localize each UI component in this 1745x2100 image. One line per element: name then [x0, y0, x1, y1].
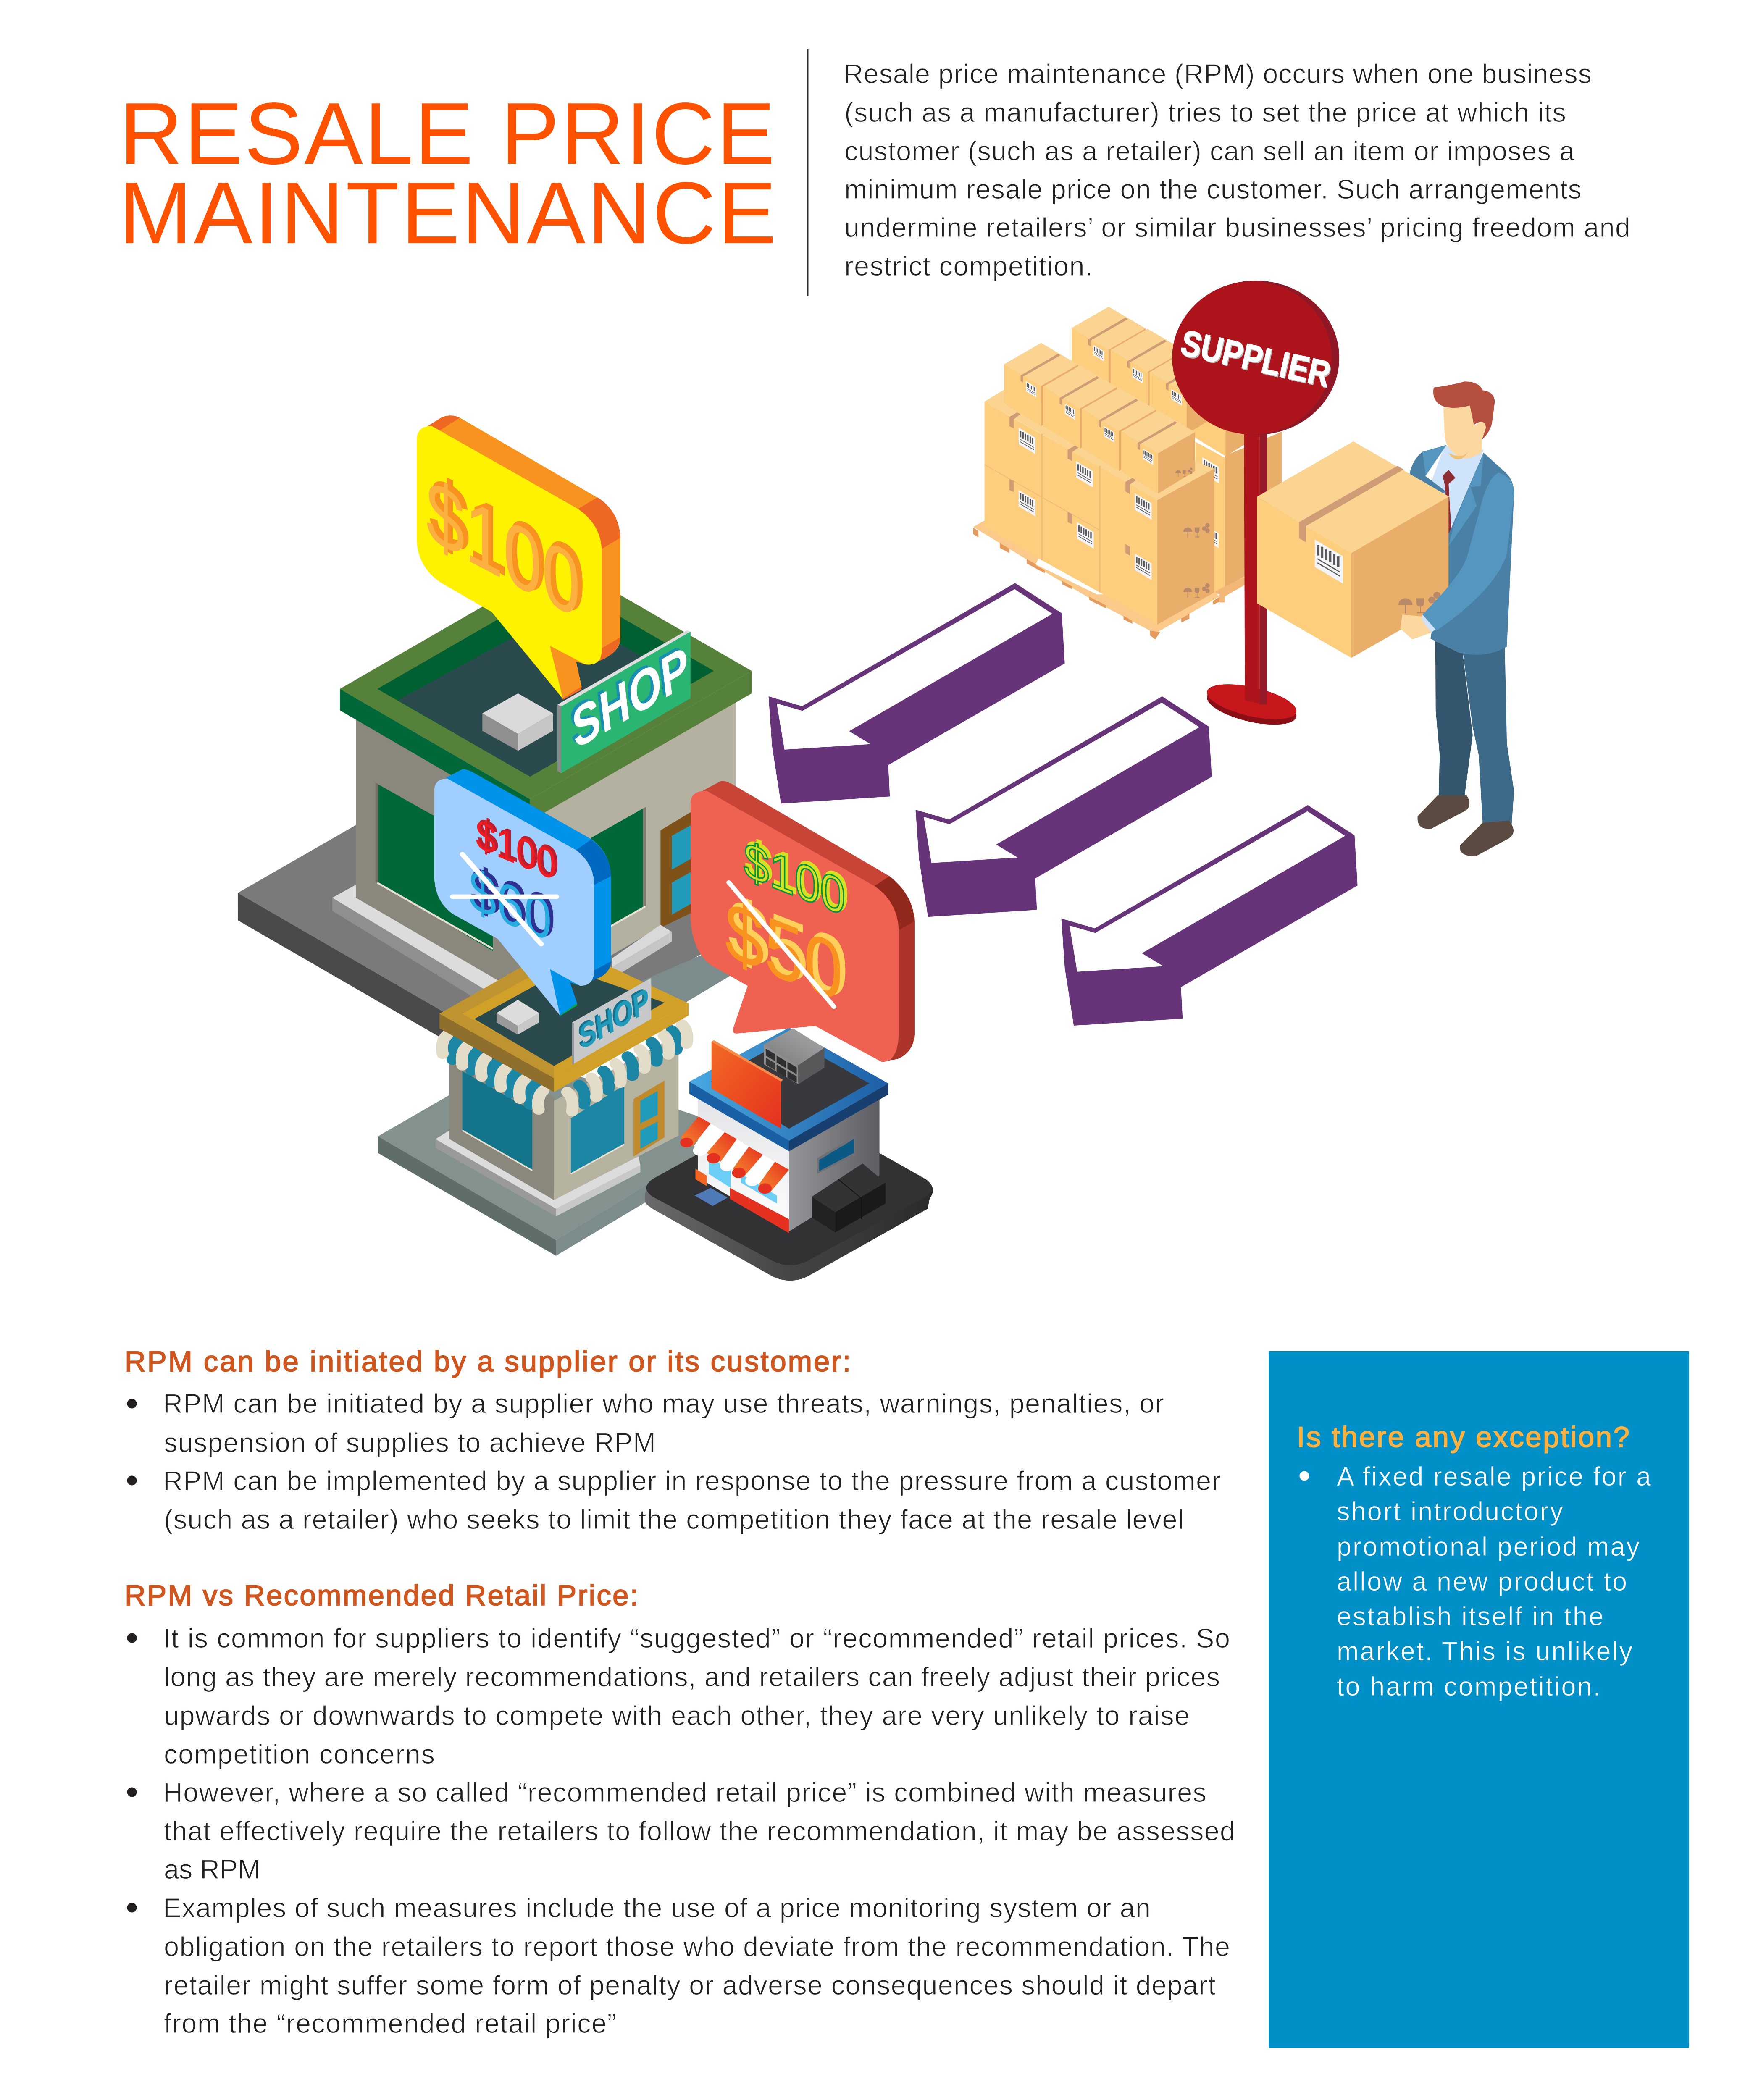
intro text: minimum resale price on the customer. Such arrangements: [844, 174, 1582, 205]
exception text: establish itself in the: [1337, 1602, 1603, 1631]
bullet list: initiated: (such as a retailer) who seeks to limit the competition they face at the resale level: [164, 1504, 1184, 1535]
sign label: SUPPLIER: [1178, 324, 1335, 396]
head: [1433, 381, 1495, 459]
red bubble prices: $100: [746, 828, 848, 924]
yellow bubble price: $100: [430, 455, 584, 636]
sign pole: [1244, 432, 1267, 705]
roof: [340, 561, 752, 821]
bullet list: initiated: RPM can be implemented by a supplier in response to the pressure from a customer: [163, 1465, 1221, 1496]
shoes: [1417, 795, 1514, 856]
exception text: [1300, 1462, 1651, 1701]
small shop walls: [449, 1034, 678, 1200]
blue bubble prices: $100: [478, 808, 558, 888]
intro text: undermine retailers’ or similar businesses’ pricing freedom and: [844, 212, 1630, 243]
stacked boxes: [984, 343, 1214, 625]
small roof vent: [497, 1000, 539, 1034]
small shop sign: SHOP: [576, 979, 649, 1056]
exception text: promotional period may: [1337, 1532, 1640, 1562]
bullet list: initiated: [127, 1388, 1221, 1535]
bullet list: recommended price: However, where a so called “recommended retail price” is combined with measures: [163, 1777, 1206, 1808]
yellow bubble price: $100: [426, 458, 580, 639]
small shop windows: [463, 1071, 624, 1174]
trousers: [1435, 640, 1514, 824]
large shop: [238, 415, 756, 1112]
arrow 1: [769, 583, 1065, 803]
person: [1257, 381, 1514, 856]
small shop: [378, 769, 731, 1256]
left window: [376, 782, 493, 951]
bullet list: recommended price: [127, 1623, 1235, 2039]
supplier scene: [973, 281, 1514, 856]
bullet list: recommended price: Examples of such measures include the use of a price monitoring system or an: [163, 1893, 1151, 1923]
small shop step: [436, 1130, 640, 1216]
exception heading: Is there any exception?: [1297, 1421, 1629, 1453]
blue bubble prices: $100: [476, 810, 556, 890]
door: [660, 811, 691, 928]
large shop sign: SHOP: [566, 631, 689, 759]
rooftop unit: [764, 1028, 825, 1084]
bullet list: recommended price: obligation on the retailers to report those who deviate from the recommendation. The: [164, 1931, 1230, 1962]
carried box: [1257, 441, 1449, 658]
right window: [591, 807, 646, 935]
bullet list: recommended price: It is common for suppliers to identify “suggested” or “recommended” retail prices. So: [163, 1623, 1230, 1654]
title: [119, 85, 776, 262]
bullet list: recommended price: competition concerns: [164, 1739, 435, 1769]
arrows: [769, 583, 1358, 1026]
small shop plate: [378, 1055, 699, 1256]
walls: [332, 695, 736, 1024]
bullet list: recommended price: that effectively require the retailers to follow the recommendation, it may be assessed: [164, 1816, 1235, 1846]
pallets: [973, 520, 1219, 639]
roof vent: [482, 693, 553, 751]
shirt and tie: [1430, 446, 1484, 534]
sign disc: [1172, 281, 1339, 435]
storefront base and mat: [695, 1169, 789, 1233]
supplier sign: [1172, 281, 1339, 732]
exception text: to harm competition.: [1337, 1672, 1600, 1701]
small shop sign: SHOP: [578, 980, 652, 1058]
small shop awning: [442, 1024, 687, 1111]
arm and hand: [1401, 472, 1514, 639]
arrow 3: [1062, 805, 1358, 1026]
windows: [709, 1136, 855, 1204]
big plate side: [630, 953, 731, 1014]
sign base: [1204, 677, 1300, 732]
bullet list: recommended price: retailer might suffer some form of penalty or adverse consequences should it depart: [164, 1970, 1216, 2000]
jacket: [1409, 445, 1514, 655]
blue bubble prices: [469, 808, 558, 955]
yellow price bubble: [417, 415, 620, 700]
red bubble prices: $50: [725, 882, 843, 1020]
sign label: SUPPLIER: [1177, 322, 1334, 394]
blue bubble prices: $60: [469, 856, 552, 955]
title: RESALE PRICE: [119, 85, 775, 183]
panel: exception: [1269, 1351, 1689, 2048]
red shop roof: [689, 1028, 888, 1151]
bullet list: recommended price: as RPM: [164, 1854, 260, 1885]
main text column: [125, 1345, 1235, 2039]
exception text: market. This is unlikely: [1337, 1637, 1632, 1666]
bullet list: recommended price: long as they are merely recommendations, and retailers can freely adjust their prices: [164, 1662, 1220, 1692]
arrow 2: [916, 696, 1212, 917]
shop base plate: [238, 789, 756, 1112]
exception text: short introductory: [1337, 1497, 1564, 1526]
bullet list: initiated: suspension of supplies to achieve RPM: [164, 1427, 656, 1458]
small shop door: [633, 1081, 665, 1157]
red bubble prices: $50: [729, 879, 847, 1017]
blue bubble prices: $60: [472, 853, 555, 952]
bullet list: initiated: RPM can be initiated by a supplier who may use threats, warnings, penalties, or: [163, 1388, 1164, 1419]
title: MAINTENANCE: [119, 164, 776, 262]
bullet list: recommended price: from the “recommended retail price”: [164, 2008, 616, 2039]
right step: [612, 925, 672, 979]
dark plate: [645, 1108, 933, 1281]
exception text: allow a new product to: [1337, 1567, 1627, 1596]
bullet list: recommended price: upwards or downwards to compete with each other, they are very unlikely to raise: [164, 1700, 1190, 1731]
heading: initiated: RPM can be initiated by a supplier or its customer:: [125, 1345, 851, 1378]
intro text: [844, 58, 1630, 281]
small shop roof: [439, 944, 689, 1092]
intro text: restrict competition.: [844, 251, 1093, 281]
divider line: [807, 49, 808, 296]
red price bubble: [691, 781, 915, 1062]
red bubble prices: [725, 828, 848, 1020]
blue price bubble: [434, 769, 611, 1016]
red awning shop: [645, 781, 933, 1281]
heading: recommended price: RPM vs Recommended Retail Price:: [125, 1579, 638, 1612]
large shop sign: SHOP: [569, 633, 692, 761]
intro text: (such as a manufacturer) tries to set the price at which its: [844, 97, 1566, 128]
intro text: Resale price maintenance (RPM) occurs when one business: [844, 58, 1592, 89]
red bubble prices: $100: [744, 830, 846, 927]
orange billboard: [712, 1040, 783, 1129]
back stack of boxes: [1072, 307, 1282, 602]
exception text: A fixed resale price for a: [1337, 1462, 1651, 1491]
intro text: customer (such as a retailer) can sell an item or imposes a: [844, 136, 1575, 166]
shop walls: [698, 1099, 880, 1231]
black crates: [812, 1163, 886, 1232]
striped awning: [680, 1116, 789, 1194]
